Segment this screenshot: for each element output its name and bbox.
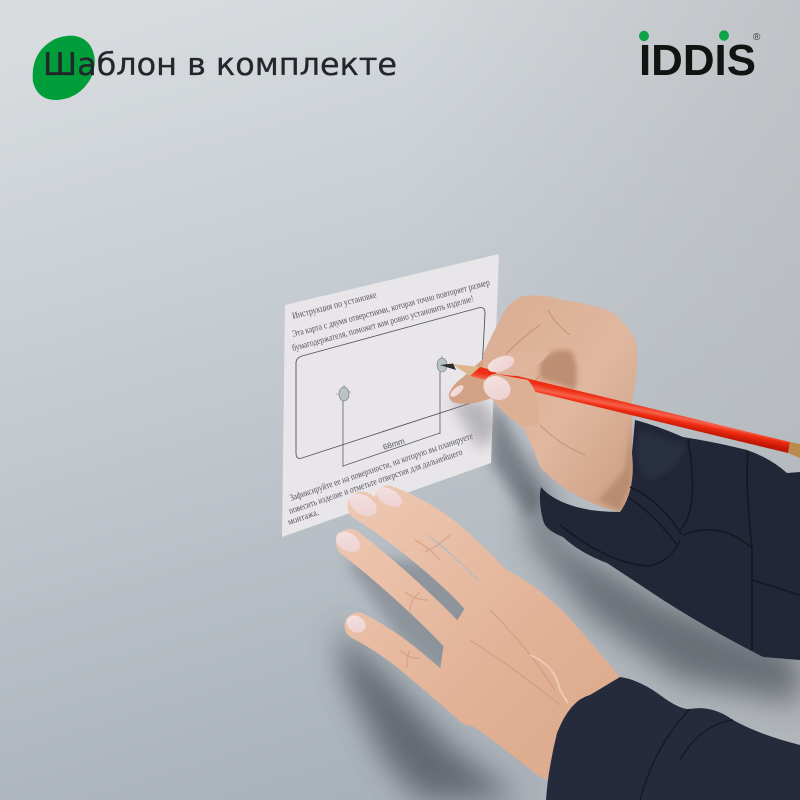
title: Шаблон в комплекте bbox=[43, 47, 397, 83]
back of hand bbox=[438, 568, 620, 780]
card intro text: бумагодержателя, поможет вам ровно установить изделие! bbox=[291, 293, 475, 354]
fingers over pencil bbox=[479, 352, 550, 427]
pencil wood bbox=[452, 364, 480, 376]
instruction card template bbox=[282, 254, 499, 537]
card heading: Инструкция по установке bbox=[291, 290, 378, 322]
green blob accent bbox=[33, 36, 95, 100]
inner palm shadow bbox=[540, 350, 577, 390]
tendons and knuckles bbox=[400, 535, 560, 705]
finger strokes bbox=[350, 499, 515, 712]
lower hand on wall bbox=[332, 483, 620, 780]
sleeve shadow on hand bbox=[598, 420, 632, 510]
upper finger bbox=[489, 352, 550, 376]
sleeve cuff folds bbox=[560, 440, 800, 650]
nail three bbox=[332, 527, 364, 557]
card intro text: Эта карта с двумя отверстиями, которая точно повторяет размер bbox=[291, 278, 491, 340]
pencil ferrule bbox=[788, 442, 800, 458]
nail two bbox=[373, 483, 405, 511]
IDDIS logo bbox=[639, 30, 761, 85]
cutout frame bbox=[296, 308, 485, 458]
red pencil bbox=[440, 364, 800, 458]
card instruction text: повесить изделие и отметьте отверстия для дальнейшего bbox=[287, 447, 464, 517]
knuckle folds bbox=[505, 310, 585, 455]
registered mark: ® bbox=[753, 32, 761, 43]
upper hand holding pencil bbox=[449, 296, 637, 512]
hidden fingertip bbox=[449, 358, 492, 404]
card bbox=[282, 254, 499, 537]
dimension lines bbox=[343, 372, 440, 467]
logo green dots bbox=[639, 30, 729, 41]
dimension label: 68mm bbox=[382, 436, 406, 452]
logo wordmark: IDDIS bbox=[639, 36, 756, 85]
lower nail bbox=[479, 372, 515, 404]
upper nail bbox=[485, 353, 517, 375]
card instruction text: монтажа. bbox=[287, 508, 320, 528]
sleeve highlight bbox=[637, 430, 685, 480]
card instruction text: Зафиксируйте ее на поверхности, на которую вы планируете bbox=[288, 431, 474, 504]
upper sleeve bbox=[540, 420, 800, 660]
pencil body bbox=[470, 367, 790, 453]
template holes bbox=[336, 356, 447, 401]
sleeve fold bbox=[640, 709, 733, 800]
nail one bbox=[345, 489, 381, 521]
vein highlight bbox=[530, 655, 568, 703]
pencil lead bbox=[440, 364, 456, 370]
lower finger bbox=[484, 374, 539, 427]
shadows cast on wall bbox=[338, 400, 800, 800]
hand shadow on card bbox=[450, 400, 500, 450]
fingertip nail bbox=[449, 383, 465, 399]
nail four bbox=[343, 612, 369, 636]
palm and fingers bbox=[483, 296, 637, 512]
lower sleeve bbox=[546, 677, 800, 800]
